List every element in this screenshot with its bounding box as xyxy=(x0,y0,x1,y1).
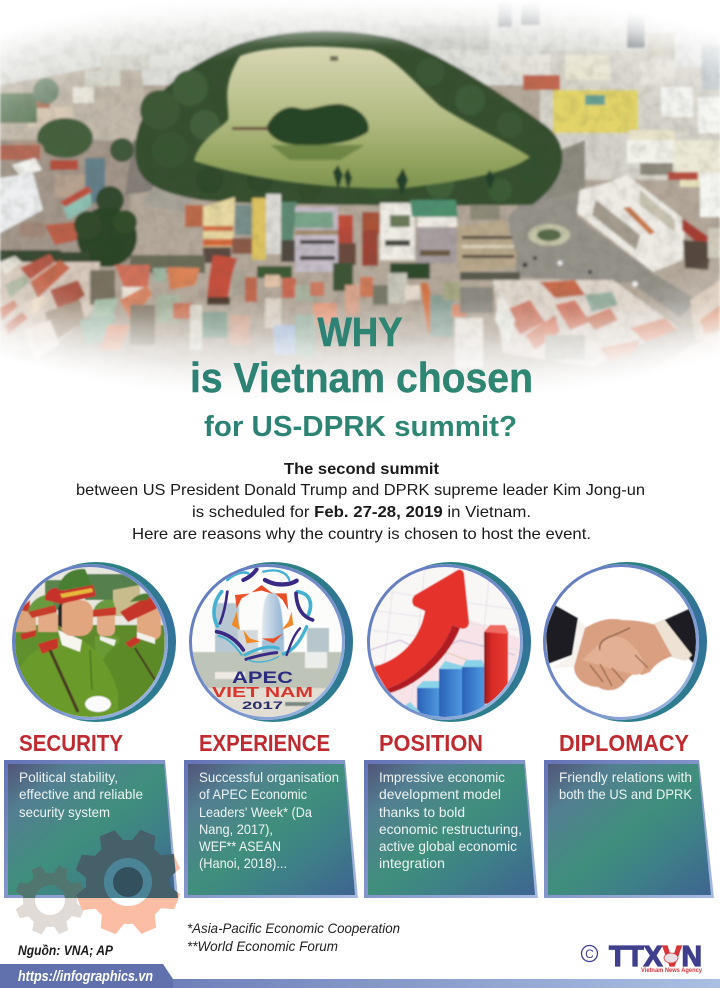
security text: Political stability, xyxy=(19,769,118,785)
bottom fade xyxy=(0,300,720,410)
small dots traffic xyxy=(522,262,528,268)
position text: Impressive economic xyxy=(379,769,505,785)
security text xyxy=(19,769,143,820)
red arrow xyxy=(373,570,469,689)
lower roofs xyxy=(0,262,100,350)
logo text VIET NAM: VIET NAM xyxy=(212,684,313,701)
aerial photo: lake and city xyxy=(0,6,720,386)
intro line 3: is scheduled for Feb. 27-28, 2019 in Vietnam. xyxy=(192,504,531,521)
road left xyxy=(125,139,155,195)
icon: large gear base xyxy=(74,828,182,936)
experience text: Nang, 2017), xyxy=(199,821,273,837)
panel: diplomacy xyxy=(544,760,714,898)
top-right city xyxy=(523,75,560,90)
hands xyxy=(574,619,672,690)
heading: security: SECURITY xyxy=(19,730,123,756)
panel: security xyxy=(4,760,182,936)
main front buildings xyxy=(203,197,235,247)
left city xyxy=(0,140,130,265)
diplomacy text: Friendly relations with xyxy=(559,769,692,785)
experience text: (Hanoi, 2018)... xyxy=(199,855,287,871)
footnotes: *Asia-Pacific Economic Cooperation xyxy=(187,920,400,936)
island xyxy=(266,104,369,145)
experience text: Successful organisation xyxy=(199,769,339,785)
title line: is Vietnam chosen: is Vietnam chosen xyxy=(190,354,533,401)
experience text: Leaders' Week* (Da xyxy=(199,804,312,820)
intro heading: The second summit xyxy=(284,461,440,478)
position text: active global economic xyxy=(379,838,517,854)
heading: experience: EXPERIENCE xyxy=(199,730,330,756)
right cuff xyxy=(653,619,692,661)
circle: APEC Viet Nam 2017 xyxy=(189,562,353,722)
plaza road xyxy=(508,192,692,316)
diplomacy text xyxy=(559,769,693,802)
position text: development model xyxy=(379,786,501,802)
circle: security soldiers xyxy=(10,560,176,722)
photo grain xyxy=(0,24,720,342)
logo: TTXVN xyxy=(582,941,702,974)
logo swirl xyxy=(214,569,313,662)
position text xyxy=(379,769,522,871)
gears seen over panel xyxy=(15,828,182,936)
main soldier xyxy=(20,636,118,720)
dark gap trees xyxy=(77,207,137,267)
intro line 4: Here are reasons why the country is chosen to host the event. xyxy=(132,526,591,543)
icon: small gear base xyxy=(15,865,85,935)
experience text: of APEC Economic xyxy=(199,786,307,802)
logo text APEC: APEC xyxy=(232,668,293,687)
intro line 2: between US President Donald Trump and DPRK supreme leader Kim Jong-un xyxy=(76,482,645,499)
security text: security system xyxy=(19,804,110,820)
logo tagline: Vietnam News Agency xyxy=(641,967,702,974)
panel: experience xyxy=(184,760,358,898)
skyline xyxy=(498,3,512,27)
diplomacy text: both the US and DPRK xyxy=(559,786,693,802)
title line: for US-DPRK summit?: for US-DPRK summit? xyxy=(204,411,517,443)
title line: WHY: WHY xyxy=(318,309,402,355)
red bar xyxy=(484,632,508,704)
position text: thanks to bold xyxy=(379,804,465,820)
title xyxy=(190,309,533,443)
white diagonal building xyxy=(577,175,685,272)
top haze xyxy=(0,0,720,45)
security text: effective and reliable xyxy=(19,786,143,802)
heading: position: POSITION xyxy=(379,730,483,756)
footnotes xyxy=(187,920,400,954)
circle: economic position arrow chart xyxy=(365,562,531,722)
logo wordmark: TTXVN xyxy=(609,941,702,973)
heading: diplomacy: DIPLOMACY xyxy=(559,730,689,756)
footnotes: **World Economic Forum xyxy=(187,938,338,954)
footer bar xyxy=(0,964,720,988)
copyright symbol: C xyxy=(585,947,594,961)
footer url: https://infographics.vn xyxy=(18,968,153,985)
experience text xyxy=(199,769,339,871)
tree ring xyxy=(135,31,563,205)
lake xyxy=(194,47,530,188)
left soldier xyxy=(37,612,59,633)
left jacket xyxy=(545,605,578,664)
fountain xyxy=(528,224,570,246)
position text: economic restructuring, xyxy=(379,821,522,837)
logo inner arrows xyxy=(232,585,293,643)
logo globe xyxy=(664,953,678,963)
mid soldier xyxy=(97,612,115,636)
left cuff xyxy=(552,619,587,668)
source: Nguồn: VNA; AP xyxy=(18,943,114,958)
intro text xyxy=(76,461,645,543)
position text: integration xyxy=(379,855,445,871)
white glove xyxy=(85,696,111,712)
right jacket xyxy=(664,608,696,664)
far-left soldier xyxy=(16,610,37,633)
cypress trees xyxy=(333,165,495,196)
right soldier xyxy=(104,644,119,696)
logo text 2017: 2017 xyxy=(242,700,283,712)
experience text: WEF** ASEAN xyxy=(199,838,281,854)
circle: diplomacy handshake xyxy=(543,562,707,722)
panel: position xyxy=(364,760,538,898)
blue bars xyxy=(417,688,440,720)
